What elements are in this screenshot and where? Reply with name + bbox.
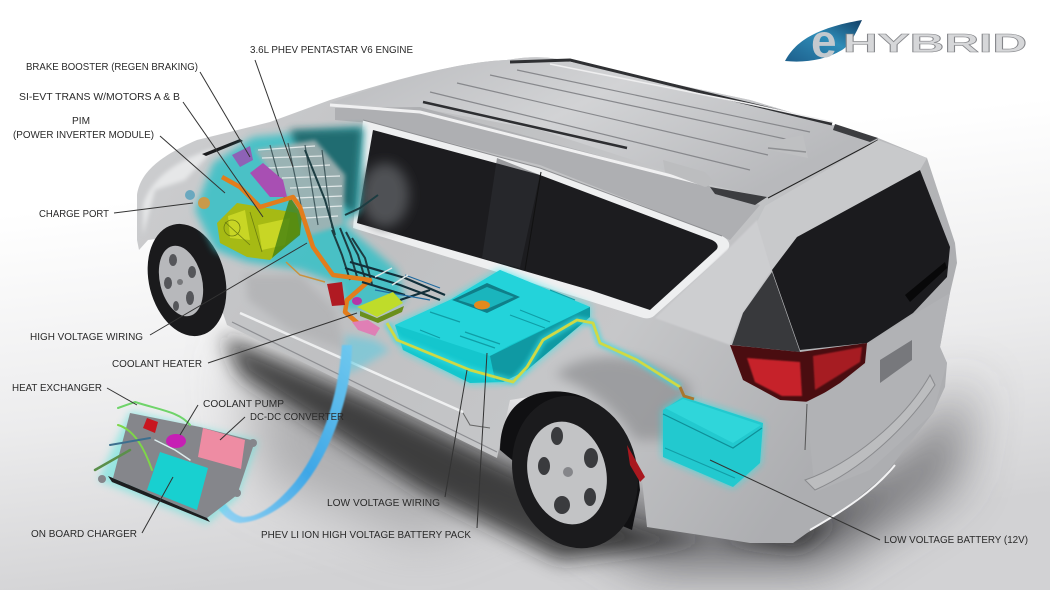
hoses bbox=[95, 402, 190, 470]
white bumper accent bbox=[810, 465, 895, 530]
logo wordmark: HYBRID bbox=[843, 28, 1027, 58]
plate edge bbox=[108, 476, 210, 522]
base plate bbox=[113, 413, 255, 518]
rear fender xray bbox=[555, 357, 690, 440]
rear wheel bbox=[496, 382, 654, 562]
side window glass bbox=[357, 130, 718, 310]
label: coolant pump: COOLANT PUMP bbox=[203, 398, 284, 410]
window gutter bbox=[335, 107, 760, 240]
plate tabs bbox=[98, 439, 257, 497]
label: low voltage wiring: LOW VOLTAGE WIRING bbox=[327, 497, 440, 509]
DC-DC box bbox=[198, 428, 245, 469]
label: power inverter bbox=[13, 115, 154, 141]
side reflector bbox=[627, 445, 645, 482]
label: heat exchanger: HEAT EXCHANGER bbox=[12, 382, 102, 394]
tail light bbox=[730, 343, 867, 402]
B pillar bbox=[482, 158, 540, 268]
orange cable bbox=[222, 177, 370, 325]
inset: on-board power electronics bbox=[95, 402, 258, 524]
battery glow bbox=[395, 270, 590, 383]
pink unit bbox=[352, 320, 380, 336]
label: coolant heater: COOLANT HEATER bbox=[112, 358, 202, 370]
magenta pump bbox=[166, 434, 186, 448]
label: DC-DC converter: DC-DC CONVERTER bbox=[250, 411, 344, 423]
seat silhouette bbox=[361, 163, 409, 227]
hood highlight bbox=[143, 148, 215, 235]
label: battery pack: PHEV LI ION HIGH VOLTAGE BATTERY PACK bbox=[261, 529, 471, 541]
window chrome bbox=[353, 120, 729, 318]
label: 12V battery: LOW VOLTAGE BATTERY (12V) bbox=[884, 534, 1028, 546]
rear roof rail bbox=[510, 60, 832, 124]
logo leaf bbox=[785, 20, 862, 62]
inset glow bbox=[98, 411, 258, 524]
label: power inverter: (POWER INVERTER MODULE) bbox=[13, 129, 154, 141]
hatch recess bbox=[805, 375, 935, 490]
logo: eHybrid bbox=[785, 15, 1027, 67]
leader lines bbox=[107, 60, 880, 540]
red coolant heater bbox=[327, 282, 345, 306]
blue connector arrow bbox=[197, 345, 352, 523]
body shell bbox=[137, 57, 957, 543]
quarter glass bbox=[732, 272, 800, 352]
label: charge port: CHARGE PORT bbox=[39, 208, 110, 220]
engine bay cutaway bbox=[185, 127, 445, 375]
rear quarter panel bbox=[655, 220, 772, 345]
roof ribs bbox=[430, 70, 810, 170]
terminal bbox=[680, 387, 694, 399]
magenta unit bbox=[352, 297, 362, 305]
red exchanger bbox=[143, 418, 158, 433]
purple brake booster bbox=[232, 146, 253, 167]
label: power inverter: PIM bbox=[72, 115, 90, 127]
label: brake booster: BRAKE BOOSTER (REGEN BRAKING) bbox=[26, 61, 198, 73]
label: high voltage wiring: HIGH VOLTAGE WIRING bbox=[30, 331, 143, 343]
battery ribs bbox=[420, 290, 575, 348]
high voltage battery pack bbox=[395, 270, 590, 383]
logo e: e bbox=[811, 15, 837, 67]
label: engine: 3.6L PHEV PENTASTAR V6 ENGINE bbox=[250, 44, 413, 56]
grey body showing below bay bbox=[245, 275, 345, 350]
windshield shade bbox=[290, 128, 362, 215]
roof bbox=[330, 57, 878, 198]
ground shadow bbox=[225, 340, 970, 565]
hatch lower panel bbox=[806, 293, 950, 492]
wiper slot bbox=[202, 139, 243, 156]
engine block texture bbox=[255, 140, 345, 235]
cyan glow under pump bbox=[345, 335, 390, 375]
hatch spoiler bbox=[757, 140, 927, 270]
front roof slit bbox=[423, 102, 627, 148]
front wheel bbox=[136, 216, 238, 344]
magenta engine motor bbox=[250, 163, 287, 197]
rear wiper handle bbox=[905, 262, 947, 302]
roof pod bbox=[663, 160, 715, 187]
door seam bbox=[463, 413, 490, 428]
black roof strips bbox=[710, 187, 767, 205]
lime DC unit bbox=[357, 292, 403, 317]
low voltage wire bbox=[387, 320, 680, 387]
label: on board charger: ON BOARD CHARGER bbox=[31, 528, 137, 540]
teal glow bbox=[195, 127, 405, 310]
charger box bbox=[147, 452, 208, 510]
sill highlight bbox=[240, 313, 463, 412]
dark hoses bbox=[305, 150, 378, 284]
orange port bbox=[474, 300, 490, 310]
van body bbox=[137, 57, 957, 543]
charge port bbox=[185, 190, 195, 200]
licence plate bbox=[880, 340, 912, 383]
battery tray bbox=[452, 283, 520, 313]
shark fin bbox=[765, 135, 808, 158]
label: transmission: SI-EVT TRANS W/MOTORS A & B bbox=[19, 91, 180, 103]
underfloor wiring bbox=[345, 262, 445, 300]
12V battery bbox=[663, 387, 763, 487]
rear glass bbox=[772, 170, 950, 350]
green transaxle bbox=[217, 203, 300, 260]
